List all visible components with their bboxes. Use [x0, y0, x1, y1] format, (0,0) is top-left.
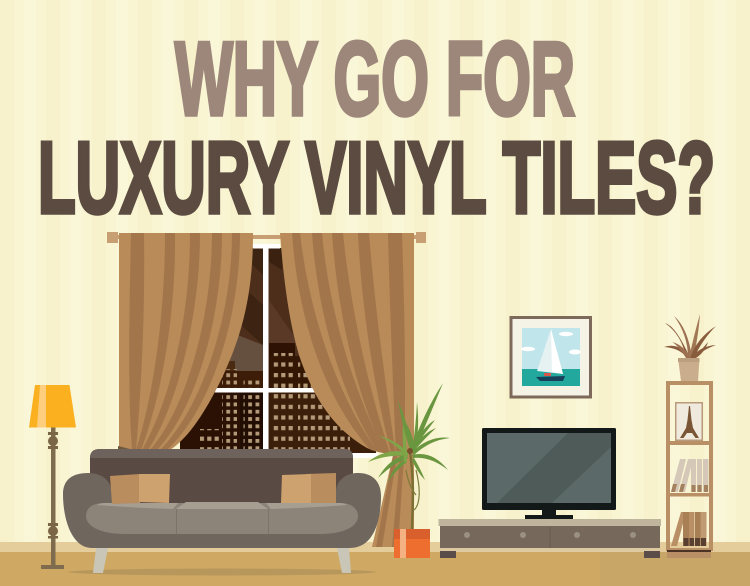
plant stem [410, 452, 413, 529]
lamp base [41, 565, 64, 569]
sofa legs [93, 548, 351, 573]
lamp shade [29, 385, 76, 428]
television [482, 428, 616, 520]
baseboard [0, 542, 750, 552]
tv console [438, 519, 661, 558]
potted plant [368, 383, 450, 558]
shelf frame [666, 381, 713, 558]
left curtain [118, 233, 253, 450]
sofa shadow [68, 568, 376, 576]
pillows [110, 473, 336, 504]
lamp knobs [48, 432, 58, 538]
console knobs [464, 532, 636, 538]
curtain rod [107, 232, 426, 243]
picture sky [522, 328, 580, 386]
eiffel tower picture [675, 402, 703, 441]
window with city view [180, 244, 378, 458]
shelf plant pot [678, 358, 700, 381]
sailboat sail [537, 329, 563, 374]
lamp pole [51, 427, 56, 565]
top shelf books [671, 459, 708, 492]
console feet [440, 551, 660, 558]
floor [0, 552, 750, 586]
bottom shelf books [671, 512, 706, 546]
bookshelf [664, 314, 716, 558]
tv stand [542, 510, 556, 516]
city lights [222, 369, 237, 453]
picture sea [522, 369, 580, 386]
framed picture [510, 316, 592, 398]
boat hull [536, 376, 565, 381]
floor lamp [29, 385, 76, 569]
sofa seat cushion [86, 503, 358, 534]
sofa back [90, 449, 353, 505]
sofa [63, 449, 381, 573]
window frame [215, 244, 378, 458]
right curtain [280, 233, 414, 547]
plant leaves [368, 383, 450, 482]
sofa body and arms [63, 473, 381, 548]
plant pot [394, 529, 430, 558]
title [38, 22, 715, 234]
shelf plant leaves [664, 314, 716, 358]
screen reflection [497, 433, 611, 503]
